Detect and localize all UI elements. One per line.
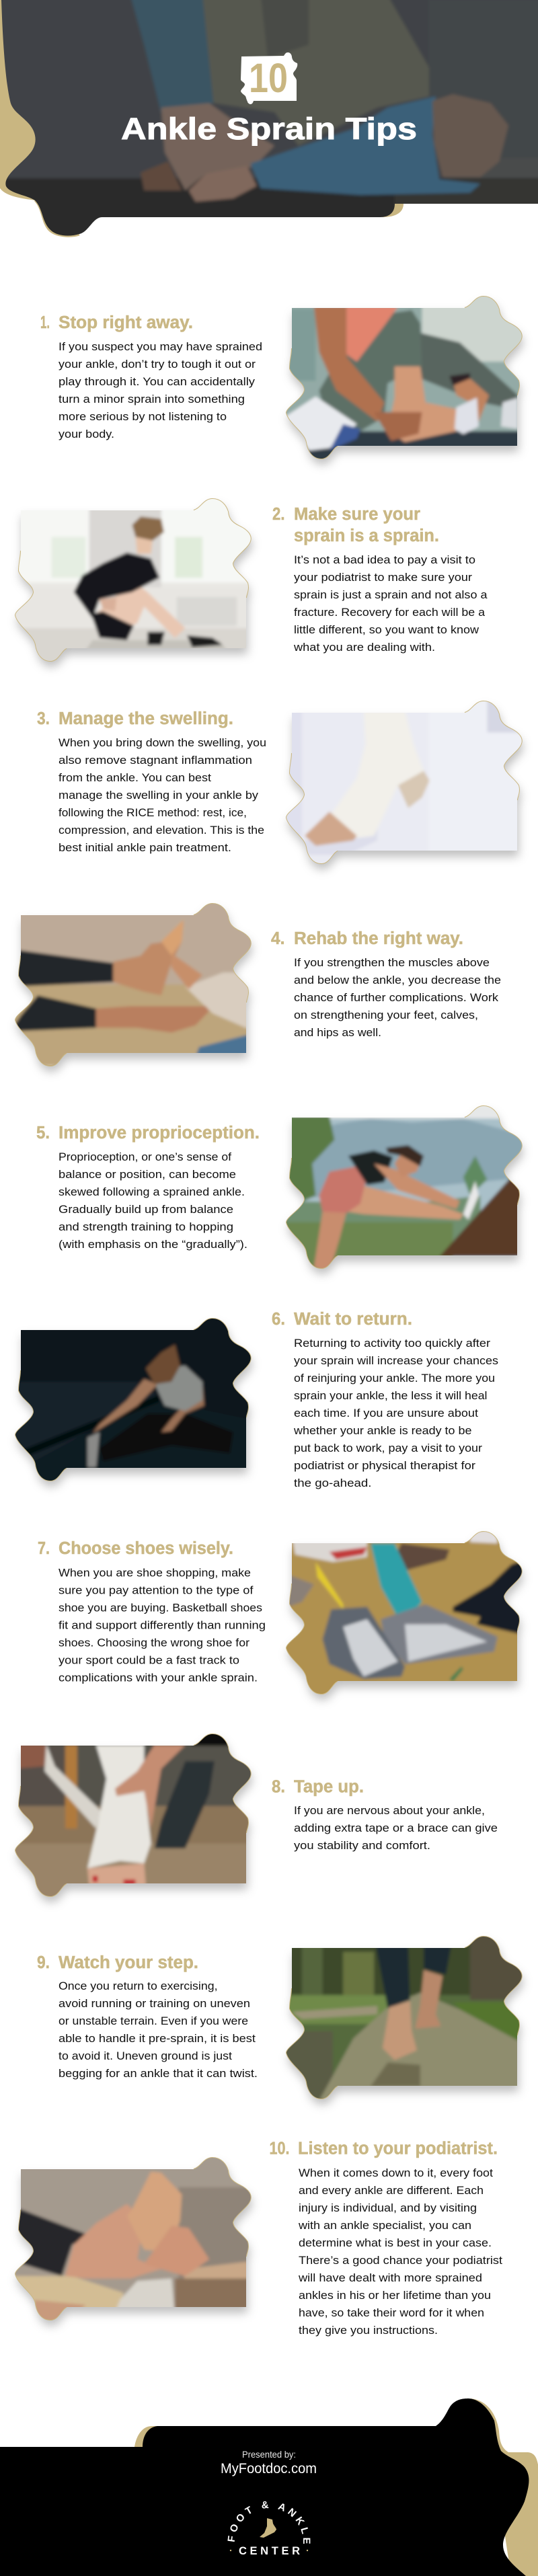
body text: chance of further complications. Work <box>294 991 499 1004</box>
heading: Improve proprioception. <box>59 1124 260 1142</box>
body text: avoid running or training on uneven <box>59 1997 250 2010</box>
body text: (with emphasis on the “gradually”). <box>59 1238 247 1251</box>
body text: skewed following a sprained ankle. <box>59 1185 245 1198</box>
panel: tip 2 <box>7 494 488 666</box>
body text: have, so take their word for it when <box>299 2306 484 2319</box>
body text: turn a minor sprain into something <box>59 393 245 405</box>
body text: to avoid it. Uneven ground is just <box>59 2050 232 2062</box>
footer black shape <box>0 2398 529 2576</box>
body text: determine what is best in your case. <box>299 2236 492 2249</box>
panel: tip 5 <box>36 1097 535 1273</box>
heading: 3. <box>37 709 50 728</box>
heading: Stop right away. <box>59 313 193 332</box>
heading: 6. <box>272 1310 285 1329</box>
body text <box>294 956 501 1039</box>
hero photo: person holding ankle, darkened <box>0 0 538 245</box>
body text: more serious by not listening to <box>59 410 227 423</box>
panel: tip 6 <box>7 1310 498 1489</box>
body text: Proprioception, or one’s sense of <box>59 1150 231 1163</box>
body text <box>294 1804 498 1852</box>
body text: put back to work, pay a visit to your <box>294 1442 482 1454</box>
heading: 1. <box>40 313 50 332</box>
heading: sprain is a sprain. <box>294 526 439 545</box>
body text <box>59 736 266 854</box>
body text <box>59 1980 258 2080</box>
body text: your ankle, don’t try to tough it out or <box>59 358 256 370</box>
body text: and hips as well. <box>294 1026 381 1039</box>
body text: sprain your ankle, the less it will heal <box>294 1389 487 1402</box>
body text: your sprain will increase your chances <box>294 1354 498 1367</box>
heading: Manage the swelling. <box>59 709 233 728</box>
body text <box>59 340 262 440</box>
heading: Watch your step. <box>59 1953 198 1972</box>
body text: It’s not a bad idea to pay a visit to <box>294 553 475 566</box>
panel: tip 7 <box>38 1527 535 1701</box>
body text: on strengthening your feet, calves, <box>294 1009 478 1021</box>
heading: 2. <box>272 505 285 524</box>
heading: Rehab the right way. <box>294 929 463 948</box>
body text: able to handle it pre-sprain, it is best <box>59 2032 256 2045</box>
body text: your sport could be a fast track to <box>59 1654 239 1666</box>
body text <box>293 553 488 654</box>
hero gold blob backing <box>0 0 404 236</box>
heading: Make sure your <box>294 505 420 524</box>
body text: fracture. Recovery for each will be a <box>294 606 486 619</box>
body text: If you strengthen the muscles above <box>294 956 490 969</box>
body text: Returning to activity too quickly after <box>294 1337 490 1350</box>
body text: whether your ankle is ready to be <box>293 1424 472 1437</box>
photo: athlete holding ankle at gym <box>284 296 527 469</box>
photo: woman stretching leg outdoors <box>274 1097 535 1273</box>
body text: little different, so you want to know <box>294 623 479 636</box>
body text: compression, and elevation. This is the <box>59 824 264 836</box>
photo: dancer sitting and holding ankle <box>7 494 268 666</box>
heading: Tape up. <box>294 1778 364 1797</box>
heading: 8. <box>272 1778 285 1797</box>
body text: Gradually build up from balance <box>59 1203 233 1216</box>
body text: and strength training to hopping <box>59 1220 233 1233</box>
number badge: 10 <box>249 55 288 101</box>
body text: you stability and comfort. <box>294 1839 430 1852</box>
body text: and every ankle are different. Each <box>299 2184 484 2197</box>
heading: Choose shoes wisely. <box>59 1539 233 1558</box>
photo: wrapping a bandage around a foot <box>13 1733 256 1907</box>
panel: tip 4 <box>7 898 501 1066</box>
photo: running shoes with insoles <box>274 1527 535 1701</box>
body text: adding extra tape or a brace can give <box>294 1822 498 1834</box>
body text: the go-ahead. <box>294 1477 371 1489</box>
body text: of reinjuring your ankle. The more you <box>294 1372 495 1384</box>
body text: will have dealt with more sprained <box>298 2271 482 2284</box>
body text: fit and support differently than running <box>59 1619 266 1631</box>
body text <box>59 1150 247 1251</box>
body text: and below the ankle, you decrease the <box>294 974 501 986</box>
body text: Once you return to exercising, <box>59 1980 218 1992</box>
body text: sure you pay attention to the type of <box>59 1584 254 1596</box>
body text: There’s a good chance your podiatrist <box>299 2254 502 2267</box>
heading: 10. <box>269 2140 289 2158</box>
body text: complications with your ankle sprain. <box>59 1672 258 1684</box>
body text: ankles in his or her lifetime than you <box>299 2289 491 2302</box>
body text: your body. <box>59 428 114 440</box>
body text: they give you instructions. <box>299 2324 438 2337</box>
heading: 5. <box>36 1124 50 1142</box>
body text: each time. If you are unsure about <box>294 1407 478 1419</box>
body text: begging for an ankle that it can twist. <box>59 2067 258 2080</box>
body text: play through it. You can accidentally <box>59 375 256 388</box>
panel: tip 3 <box>37 697 535 869</box>
logo: Foot and Ankle Center: CENTER <box>239 2545 300 2557</box>
panel: tip 10 <box>7 2140 502 2337</box>
body text: manage the swelling in your ankle by <box>59 789 259 802</box>
panel: tip 9 <box>37 1930 535 2103</box>
body text: with an ankle specialist, you can <box>298 2219 471 2232</box>
body text: what you are dealing with. <box>293 641 435 654</box>
heading: 4. <box>271 929 285 948</box>
body text: shoe you are buying. Basketball shoes <box>59 1602 262 1614</box>
body text: sprain is just a sprain and not also a <box>294 588 488 601</box>
body text: When you are shoe shopping, make <box>59 1567 251 1579</box>
body text: When it comes down to it, every foot <box>299 2167 493 2179</box>
body text: also remove stagnant inflammation <box>59 754 252 767</box>
body text: best initial ankle pain treatment. <box>59 841 231 854</box>
panel: tip 1 <box>40 290 535 472</box>
icon: foot <box>260 2518 276 2538</box>
body text: or unstable terrain. Even if you were <box>59 2015 248 2027</box>
body text <box>59 1567 266 1684</box>
panel: hero header <box>0 0 538 245</box>
presented by: Presented by: <box>242 2449 296 2460</box>
panel: tip 8 <box>7 1729 498 1911</box>
body text: from the ankle. You can best <box>59 771 211 784</box>
photo: bandaged foot on white sheet <box>274 697 535 869</box>
heading: 9. <box>37 1953 50 1972</box>
body text: injury is individual, and by visiting <box>299 2201 477 2214</box>
heading: Wait to return. <box>294 1310 412 1329</box>
heading: Listen to your podiatrist. <box>298 2140 498 2158</box>
panel: footer <box>0 2398 538 2576</box>
body text: When you bring down the swelling, you <box>59 736 266 749</box>
body text: shoes. Choosing the wrong shoe for <box>59 1637 249 1649</box>
title: Ankle Sprain Tips <box>121 112 417 146</box>
photo: man stretching in dark gym <box>7 1313 268 1488</box>
body text <box>298 2167 502 2337</box>
body text: balance or position, can become <box>59 1168 236 1181</box>
footer gold blob backing <box>134 2398 538 2576</box>
photo: bare feet walking on a log <box>274 1930 535 2103</box>
body text: your podiatrist to make sure your <box>294 571 472 584</box>
body text: podiatrist or physical therapist for <box>294 1459 475 1472</box>
body text: following the RICE method: rest, ice, <box>59 806 247 819</box>
body text: If you suspect you may have sprained <box>59 340 262 353</box>
logo: Foot and Ankle Center: FOOT & ANKLE <box>227 2501 311 2544</box>
heading <box>272 505 439 545</box>
photo: hands massaging a foot <box>7 2151 268 2324</box>
heading: 7. <box>38 1539 50 1558</box>
body text: If you are nervous about your ankle, <box>294 1804 485 1817</box>
body text <box>293 1337 498 1489</box>
website: MyFootdoc.com <box>221 2461 317 2476</box>
photo: foot massage with black leggings <box>7 898 268 1066</box>
